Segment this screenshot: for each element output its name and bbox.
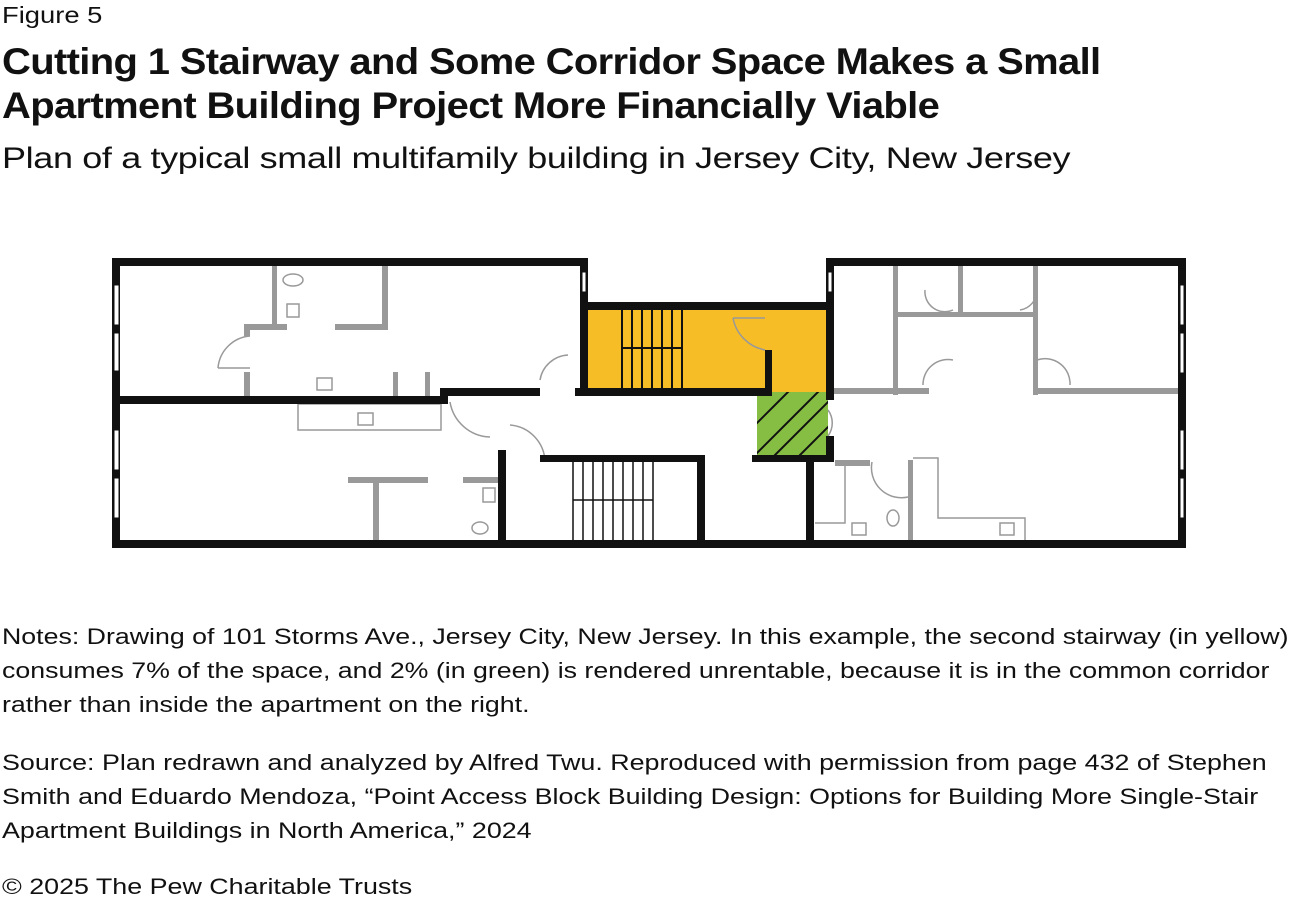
subtitle: Plan of a typical small multifamily building in Jersey City, New Jersey (2, 142, 1070, 175)
notes: Notes: Drawing of 101 Storms Ave., Jersey City, New Jersey. In this example, the second stairway (in yellow) (2, 624, 1289, 649)
notes (2, 624, 1289, 717)
title (2, 41, 1100, 126)
title: Apartment Building Project More Financially Viable (2, 85, 939, 126)
windows (114, 272, 1184, 518)
black walls (112, 258, 1186, 548)
source: Apartment Buildings in North America,” 2024 (2, 818, 532, 843)
copyright: © 2025 The Pew Charitable Trusts (2, 874, 412, 899)
title: Cutting 1 Stairway and Some Corridor Space Makes a Small (2, 41, 1100, 82)
grey interior walls (244, 265, 1178, 540)
green unrentable corridor (757, 392, 828, 455)
yellow stairway (588, 310, 828, 392)
source (2, 750, 1267, 843)
source: Source: Plan redrawn and analyzed by Alfred Twu. Reproduced with permission from page 432 of Stephen (2, 750, 1267, 775)
second stair (573, 462, 653, 540)
figure label: Figure 5 (2, 2, 102, 28)
source: Smith and Eduardo Mendoza, “Point Access Block Building Design: Options for Building More Single-Stair (2, 784, 1258, 809)
notes: consumes 7% of the space, and 2% (in green) is rendered unrentable, because it is in the common corridor (2, 658, 1269, 683)
notes: rather than inside the apartment on the right. (2, 692, 529, 717)
floor plan (112, 258, 1186, 548)
